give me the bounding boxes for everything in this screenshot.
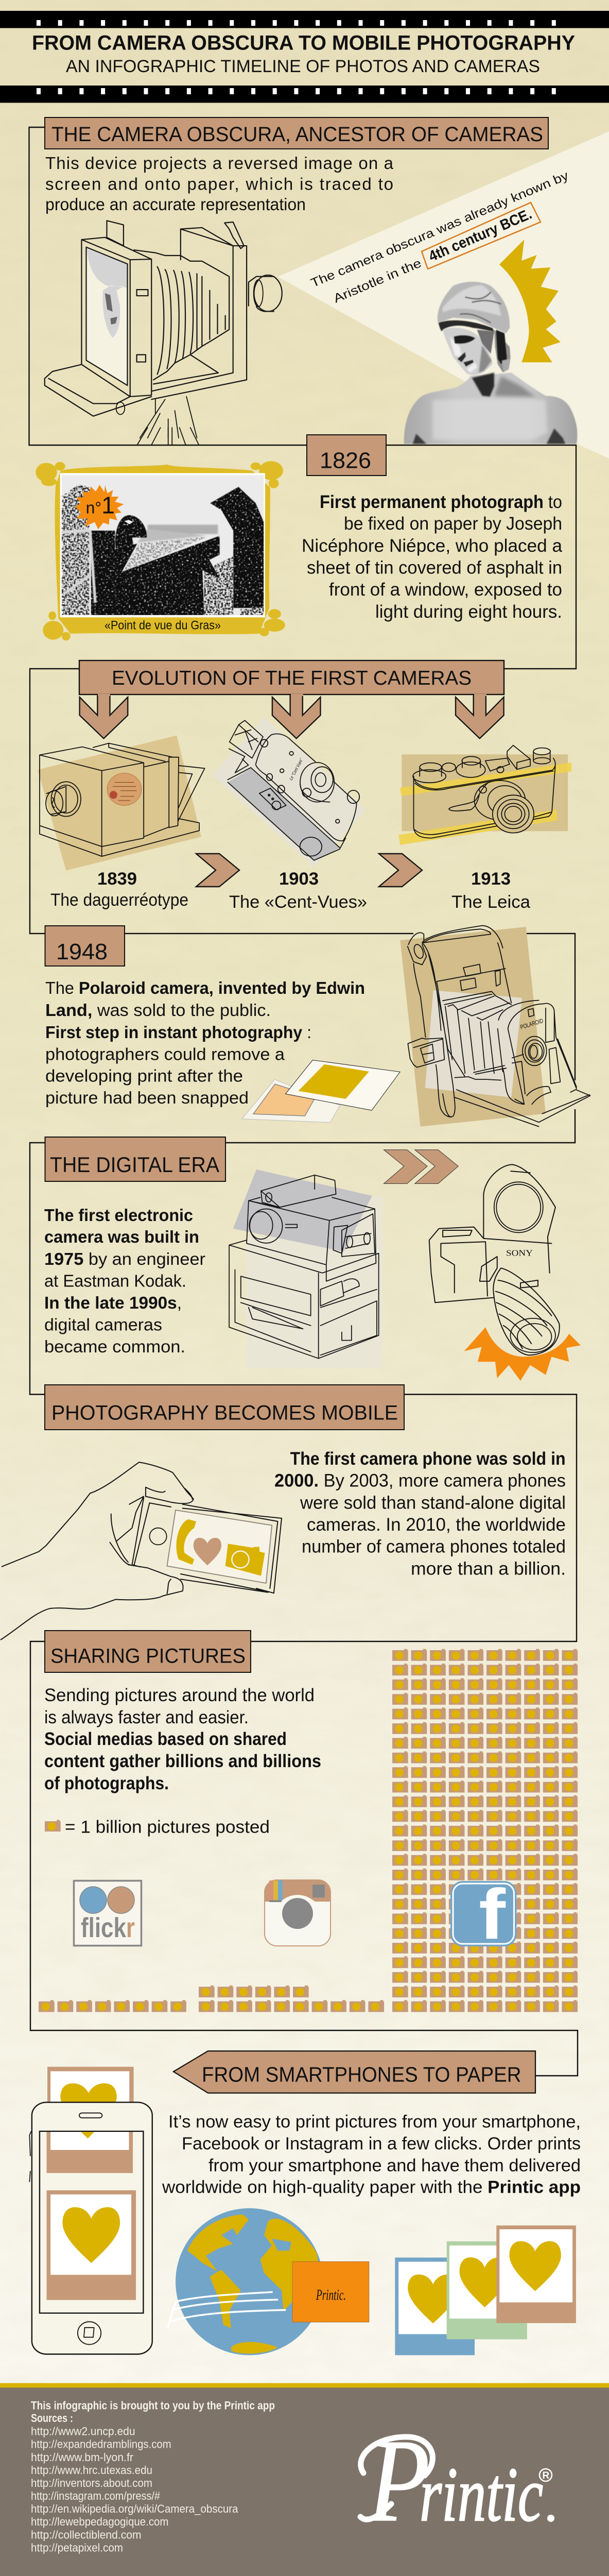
labels: 1839 [50,869,188,910]
panel: the digital era [44,1137,581,1381]
film strip top [0,11,609,28]
description: of photographs. [44,1773,169,1793]
timeline frame lines [29,127,578,2076]
chart: instagram pictures [199,1984,387,2013]
description: The first electronic [44,1206,193,1225]
description: number of camera phones totaled [302,1537,566,1557]
description: became common. [44,1337,185,1356]
description: produce an accurate representation [45,195,306,214]
icon: Cent-Vues camera [212,717,366,867]
badge: n°1 [75,485,124,529]
heading [45,1385,404,1430]
logo: instagram [265,1880,330,1946]
heading [45,1631,251,1672]
gold sun rays [499,240,561,362]
labels: 1913: The Leica [451,892,530,912]
panel: evolution of the first cameras [38,660,571,912]
credits and sources [31,2399,275,2554]
description: The first camera phone was sold in [290,1449,566,1469]
panel: 1826 [36,435,563,640]
description: is always faster and easier. [44,1707,249,1727]
arrow: double chevron [384,1150,458,1183]
globe with Printic box [168,2208,369,2355]
logo: Printic [360,2415,554,2546]
heading arrow banner: FROM SMARTPHONES TO PAPER [202,2062,521,2086]
credits and sources: http://lewebpedagogique.com [31,2515,169,2528]
description: camera was built in [44,1227,199,1246]
heading arrow banner [173,2051,535,2093]
panel: 1948 polaroid [45,926,590,1127]
icon: view camera [45,221,282,438]
light beam from the camera [278,131,609,459]
callout: Aristotle: The camera obscura was already known by [309,168,570,291]
logo: Printic: R [543,2470,550,2481]
labels: 1903: The «Cent-Vues» [229,892,367,912]
logo: flickr: flickr [81,1912,135,1943]
labels: 1903: 1903 [279,869,319,889]
description: Social medias based on shared [44,1729,287,1749]
description: It’s now easy to print pictures from your smartphone, [168,2112,581,2132]
credits and sources: http://petapixel.com [31,2541,123,2554]
labels: 1839: The daguerréotype [50,890,188,910]
arrow: chevron 1 [196,854,239,887]
logo: facebook: f [479,1875,506,1954]
footer [0,2383,609,2576]
chart: facebook pictures [392,1648,581,2013]
description: 1975 by an engineer [44,1249,205,1268]
label on polaroid: POLAROID [519,1017,544,1031]
logo: Printic: P [367,2415,430,2546]
description: The Polaroid camera, invented by Edwin [45,978,365,997]
logo: Printic: rintic [420,2452,543,2537]
panel: camera obscura [45,117,578,445]
description: Nicéphore Niépce, who placed a [302,536,563,556]
description: at Eastman Kodak. [44,1272,186,1291]
description: screen and onto paper, which is traced to [45,175,393,194]
description: Facebook or Instagram in a few clicks. Order prints [182,2134,581,2154]
description: 2000. By 2003, more camera phones [274,1471,566,1491]
framed first photograph [36,461,285,640]
label: SONY: SONY [506,1248,533,1258]
panel: from smartphones to paper [29,2051,581,2355]
description [302,492,563,622]
statue of Aristotle [404,282,578,444]
description: picture had been snapped [45,1088,249,1107]
year badge: 1826 [320,448,371,473]
description [162,2112,581,2197]
title: FROM CAMERA OBSCURA TO MOBILE PHOTOGRAPHY [32,32,575,55]
credits and sources: Sources : [31,2412,73,2425]
labels: 1913: 1913 [471,869,511,889]
callout: Aristotle [309,168,570,306]
description: were sold than stand-alone digital [300,1493,566,1513]
labels: 1903 [229,869,367,912]
chart: flickr pictures [39,1999,189,2013]
banner with three arrows: EVOLUTION OF THE FIRST CAMERAS [112,667,472,689]
credits and sources: http://www.bm-lyon.fr [31,2451,133,2464]
heading: PHOTOGRAPHY BECOMES MOBILE [51,1401,398,1424]
credits and sources: http://collectiblend.com [31,2529,142,2541]
hand holding phone [1,1462,282,1640]
icon: Sony camera [429,1164,581,1381]
caption: «Point de vue du Gras» [105,619,221,633]
icon: first electronic camera [229,1170,382,1368]
badge: n°1: n°1 [86,492,115,519]
year badge: 1948 [56,939,108,964]
heading: THE DIGITAL ERA [50,1153,219,1177]
credits and sources: http://expandedramblings.com [31,2438,171,2450]
logo: flickr [74,1880,141,1945]
credits and sources: http://www.hrc.utexas.edu [31,2464,152,2477]
description [45,978,365,1107]
callout: Aristotle: 4th century BCE. [426,206,534,265]
description: developing print after the [45,1066,243,1086]
legend: = 1 billion pictures posted [65,1818,270,1837]
instant prints [242,1060,400,1123]
description [44,1206,205,1356]
heading [45,1137,225,1181]
panel: photography becomes mobile [1,1385,566,1640]
globe with Printic box: Printic. [316,2286,346,2303]
header [0,11,609,103]
label on Cent-Vues: Le “Cent Vues” [288,757,304,781]
description: First permanent photograph to [320,492,562,512]
description [274,1449,566,1579]
smartphone printing photos [29,2067,152,2354]
description: cameras. In 2010, the worldwide [307,1515,566,1535]
description [45,154,394,214]
description: worldwide on high-quality paper with the Printic app [162,2178,581,2197]
year badge [45,926,125,966]
labels: 1913 [451,869,530,912]
labels: 1839: 1839 [97,869,137,889]
description: more than a billion. [411,1559,566,1579]
credits and sources: http://inventors.about.com [31,2477,152,2489]
description: This device projects a reversed image on a [45,154,394,173]
description [44,1685,321,1793]
description: light during eight hours. [375,602,562,622]
description: front of a window, exposed to [329,580,562,600]
description: digital cameras [44,1315,162,1334]
description: from your smartphone and have them delivered [208,2156,581,2175]
description: be fixed on paper by Joseph [344,514,562,534]
heading: SHARING PICTURES [50,1645,246,1667]
credits and sources: http://instagram.com/press/# [31,2489,161,2502]
description: content gather billions and billions [44,1751,321,1771]
banner with three arrows [79,660,504,738]
credits and sources: This infographic is brought to you by the Printic app [31,2399,275,2412]
subtitle: AN INFOGRAPHIC TIMELINE OF PHOTOS AND CAMERAS [66,57,540,76]
panel: sharing pictures [39,1631,581,2013]
arrow: chevron 2 [379,854,422,887]
icon: Leica camera [398,745,571,845]
film strip bottom [0,86,609,103]
credits and sources: http://www2.uncp.edu [31,2425,135,2438]
description: photographers could remove a [45,1045,285,1064]
stack of printed photos [395,2226,576,2355]
callout: Aristotle: Aristotle in the [332,256,424,306]
credits and sources: http://en.wikipedia.org/wiki/Camera_obscura [31,2502,238,2515]
description: First step in instant photography : [45,1023,311,1042]
description: In the late 1990s, [44,1293,182,1312]
logo: facebook [450,1875,517,1954]
description: Land, was sold to the public. [45,1001,271,1020]
description: Sending pictures around the world [44,1685,315,1705]
icon: daguerreotype camera [38,735,205,871]
heading: THE CAMERA OBSCURA, ANCESTOR OF CAMERAS [51,123,543,146]
icon: polaroid camera [400,926,590,1127]
year badge [307,435,386,476]
description: sheet of tin covered of asphalt in [307,557,562,578]
